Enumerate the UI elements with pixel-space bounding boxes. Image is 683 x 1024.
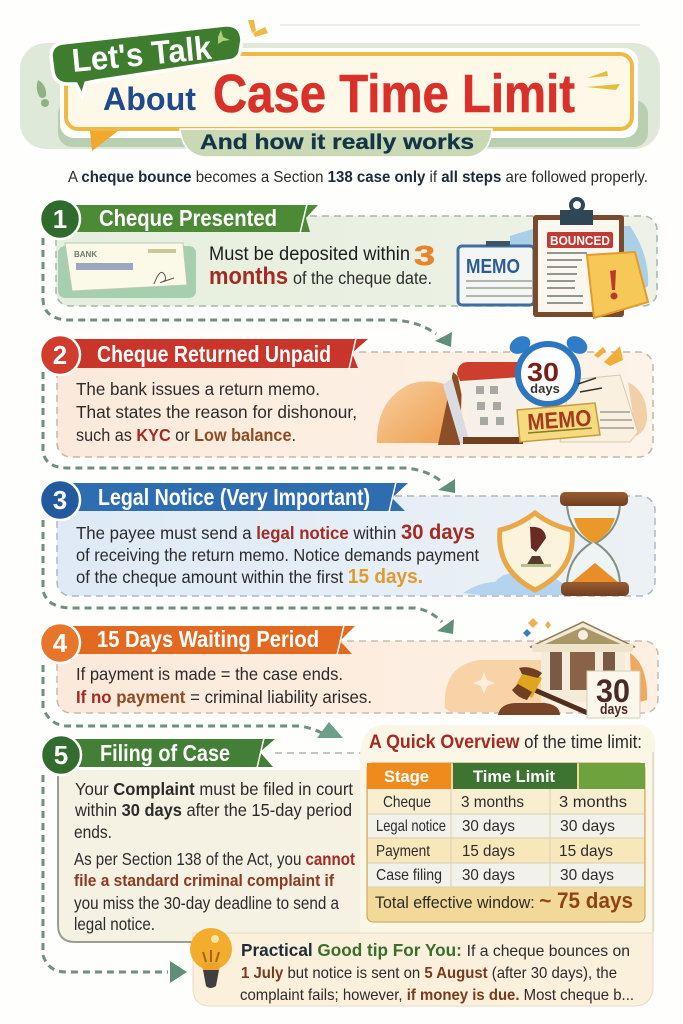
step 1 text: of the cheque date. — [293, 268, 432, 288]
step 2 text: The bank issues a return memo. — [76, 379, 320, 399]
step 5 text: As per Section 138 of the Act, you cannot — [74, 849, 355, 869]
step 4 banner: 4 — [53, 628, 68, 658]
title — [103, 64, 575, 124]
icon: calendar, clock and memo: days — [530, 381, 560, 396]
step 5 text: legal notice. — [74, 914, 155, 934]
arrow 1 — [435, 332, 452, 347]
panel: step 5 — [41, 735, 365, 942]
header banner — [20, 20, 660, 157]
title: Case Time Limit — [213, 64, 575, 124]
step 1 text: months — [209, 263, 288, 290]
subtitle: And how it really works — [200, 131, 474, 154]
step 1 banner: Cheque Presented — [99, 205, 277, 231]
icon: calendar, clock and memo: MEMO — [527, 405, 592, 435]
icon: courthouse, gavel and 30 days card — [445, 618, 647, 718]
panel: practical tip — [190, 928, 653, 1006]
step 1 text — [209, 240, 435, 290]
step 2 text — [76, 379, 357, 445]
table rows: 30 days — [560, 867, 614, 884]
step 1 banner — [40, 199, 318, 239]
step 3 text: The payee must send a legal notice within 30 days — [76, 521, 475, 544]
table rows: Cheque — [383, 794, 431, 811]
table rows: 30 days — [462, 867, 515, 884]
step 4 banner — [40, 623, 355, 663]
step 4 text: If no payment = criminal liability arises. — [76, 687, 372, 707]
step 3 banner: Legal Notice (Very Important) — [98, 484, 370, 510]
table rows: 3 months — [461, 794, 524, 811]
icon: calendar, clock and memo — [377, 333, 647, 445]
connector 1 — [43, 238, 436, 334]
arrow 3 — [437, 619, 454, 634]
panel: quick overview — [360, 725, 655, 934]
green speech bubble — [51, 25, 242, 96]
step 4 banner: 15 Days Waiting Period — [97, 626, 319, 652]
table header — [367, 763, 645, 789]
connector 3 — [43, 520, 442, 622]
arrow 5 — [170, 961, 187, 983]
step 2 banner: 2 — [53, 340, 67, 370]
tip text — [240, 940, 634, 1004]
tip text: 1 July but notice is sent on 5 August (after 30 days), the — [241, 965, 617, 982]
step 4 text — [76, 664, 372, 707]
icon: cheque — [58, 243, 196, 298]
icon: memo and bounced clipboard — [458, 199, 648, 318]
step 5 text: Your Complaint must be filed in court — [75, 779, 353, 799]
step 3 banner — [40, 480, 408, 520]
icon: shield — [463, 513, 572, 595]
table — [367, 763, 645, 922]
subtitle — [180, 129, 492, 157]
table rows: Case filing — [376, 867, 442, 884]
step 4 text: If payment is made = the case ends. — [76, 664, 343, 684]
step 1 text: 3 — [414, 240, 435, 271]
panel: step 4 — [40, 618, 658, 718]
green speech bubble: Let's Talk — [70, 29, 214, 79]
step 5 banner: 5 — [54, 740, 68, 770]
step 5 text: within 30 days after the 15-day period — [74, 800, 352, 820]
step 5 text: you miss the 30-day deadline to send a — [74, 893, 339, 913]
arrow 4 — [317, 722, 343, 738]
step 2 banner: Cheque Returned Unpaid — [97, 341, 331, 367]
step 5 text: file a standard criminal complaint if — [74, 871, 334, 890]
step 3 text — [76, 521, 479, 588]
step 2 text: such as KYC or Low balance. — [76, 425, 296, 445]
step 5 banner — [41, 735, 275, 775]
title: About — [103, 81, 196, 117]
table header: Time Limit — [473, 767, 555, 786]
icon: calendar, clock and memo: 30 — [527, 357, 559, 387]
step 3 text: of the cheque amount within the first 15 days. — [76, 566, 423, 588]
icon: hourglass — [560, 492, 629, 596]
connector 5 — [43, 775, 168, 972]
table rows: Payment — [376, 843, 430, 860]
connector 2 — [43, 372, 442, 482]
step 5 banner: Filing of Case — [100, 740, 230, 766]
icon: memo and bounced clipboard: MEMO — [466, 256, 520, 278]
table rows: 15 days — [462, 843, 515, 860]
step 2 text: That states the reason for dishonour, — [76, 402, 357, 422]
table rows: Legal notice — [376, 818, 446, 835]
step 1 banner: 1 — [53, 204, 67, 234]
icon: light bulb — [190, 928, 232, 988]
step 3 banner: 3 — [53, 485, 67, 515]
arrow 2 — [438, 479, 455, 493]
icon: courthouse, gavel and 30 days card: 30 — [596, 673, 630, 709]
table rows — [368, 789, 644, 887]
panel: step 1 — [40, 199, 657, 318]
tip text: complaint fails; however, if money is due. Most cheque b... — [240, 987, 634, 1004]
step 1 text: Must be deposited within — [209, 244, 410, 265]
panel: step 3 — [40, 480, 655, 596]
table rows: 15 days — [559, 843, 613, 860]
table rows: 30 days — [560, 818, 615, 835]
connector 4 — [43, 665, 322, 733]
tip text: Practical Good tip For You: If a cheque bounces on — [241, 940, 630, 960]
table header: Stage — [384, 767, 429, 786]
total row: Total effective window: ~ 75 days — [375, 888, 633, 913]
table rows: 30 days — [462, 818, 515, 835]
icon: cheque: BANK — [74, 250, 97, 259]
tagline: A cheque bounce becomes a Section 138 case only if all steps are followed properly. — [68, 169, 648, 186]
panel: step 2 — [40, 333, 653, 457]
step 2 banner — [40, 335, 368, 375]
overview heading: A Quick Overview of the time limit: — [369, 732, 642, 753]
icon: memo and bounced clipboard: BOUNCED — [550, 233, 610, 248]
icon: courthouse, gavel and 30 days card: days — [600, 701, 628, 718]
step 3 text: of receiving the return memo. Notice demands payment — [76, 545, 479, 565]
step 5 text: ends. — [74, 822, 112, 842]
step 5 text — [74, 779, 355, 934]
table rows: 3 months — [559, 794, 627, 811]
